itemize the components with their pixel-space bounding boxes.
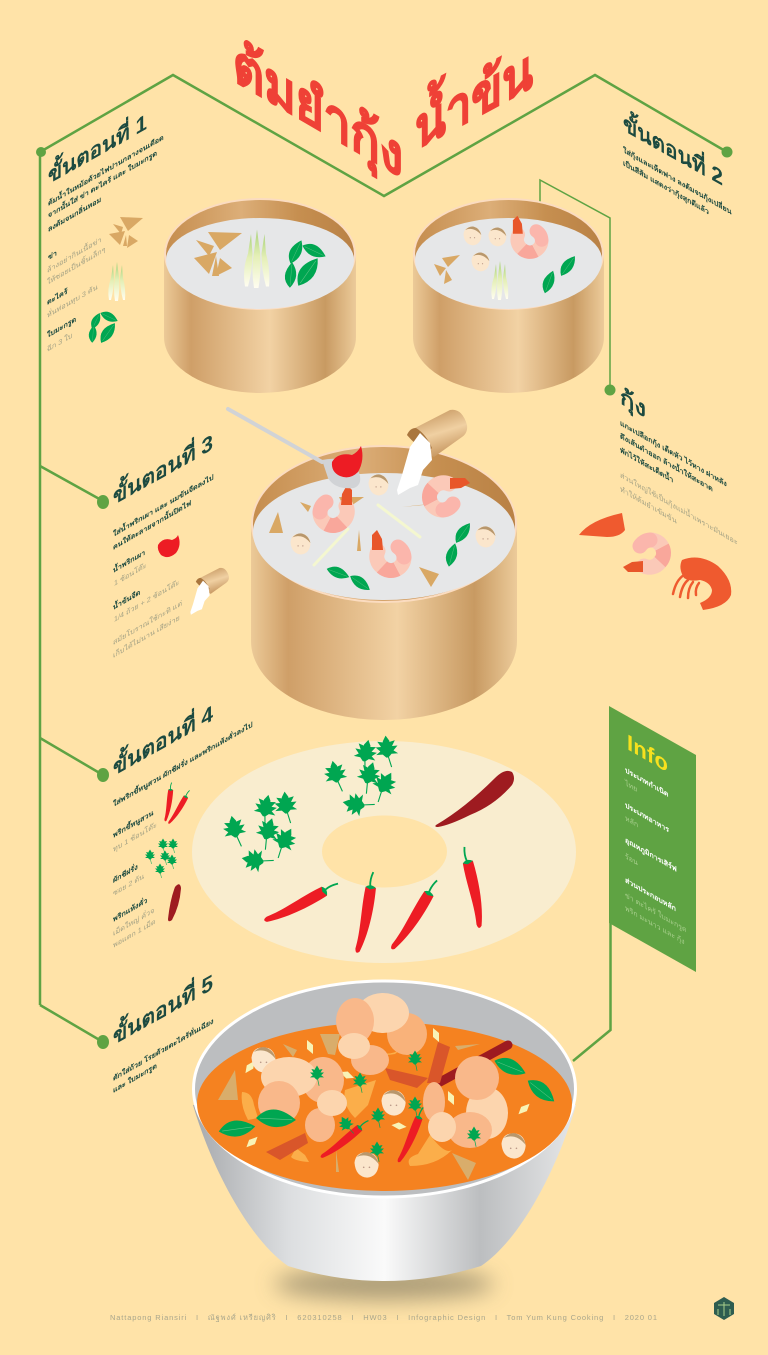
step 4 text: พริกขี้หนูสวน — [113, 806, 154, 841]
step 3 text: ใส่น้ำพริกเผา และ นมข้นจืดลงไป — [113, 471, 214, 539]
milk can pouring — [397, 410, 467, 495]
step 3 text: ขั้นตอนที่ 3 — [113, 425, 213, 511]
step 3 text: สมัยโบราณใช้กะทิ แต่ — [113, 599, 182, 647]
step 3 text: เก็บได้ไม่นาน เสียง่าย — [113, 612, 180, 660]
step 1 text: หั่นท่อนทุบ 3 ต้น — [47, 281, 98, 320]
icon: small dried chili — [168, 884, 181, 921]
icon: lemongrass small — [108, 262, 125, 301]
icon: milk can small — [190, 568, 229, 615]
step 4 text: ซอย 2 ต้น — [113, 871, 145, 898]
pot 2 — [413, 198, 604, 393]
shrimp top — [336, 993, 428, 1088]
step 1 text — [47, 104, 164, 354]
prawn prep text: ดึงเส้นดำออก ล้างน้ำให้สะอาด — [620, 430, 713, 493]
step 4 text: ใส่พริกขี้หนูสวน ผักชีฝรั่ง และพริกแห้งคั่วลงไป — [113, 718, 253, 810]
step 4 text: ทุบ 1 ช้อนโต๊ะ — [113, 820, 157, 854]
icon: small herbs — [145, 838, 178, 878]
info panel: ประเภทกำเนิด — [625, 766, 668, 799]
green connector lines — [36, 75, 732, 1061]
info panel: ไทย — [624, 778, 637, 794]
tom yum bowl — [193, 981, 576, 1281]
footer credits: Nattapong Riansiri I ณัฐพงศ์ เหรียญศิริ I 620310258 I HW03 I Infographic Design I Tom Yum Kung Cooking I 2020 01 — [110, 1313, 657, 1322]
step 3 text: น้ำพริกเผา — [113, 546, 145, 575]
dried chili in soup — [440, 1045, 508, 1082]
shrimp right — [423, 1042, 508, 1148]
step 4 text — [113, 695, 253, 950]
pot 2 ingredients — [434, 216, 579, 300]
info panel: Info — [627, 730, 668, 778]
prawn prep text: แกะเปลือกกุ้ง เด็ดหัว ไว้หาง ผ่าหลัง — [620, 417, 727, 489]
step 1 text: ต้มน้ำในหม้อด้วยไฟปานกลางจนเดือด — [48, 131, 164, 208]
chilies — [263, 846, 490, 954]
step 2 text: ขั้นตอนที่ 2 — [623, 106, 723, 192]
step 1 text: ขั้นตอนที่ 1 — [48, 104, 147, 190]
info panel: หลัก — [625, 814, 638, 829]
step 3 text: คนให้ละลายจากนั้นปิดไฟ — [113, 497, 191, 552]
prawn prep text — [620, 384, 738, 547]
step 1 text: จากนั้นใส่ ข่า ตะไคร้ และ ใบมะกรูด — [48, 147, 157, 221]
title: ต้มยำกุ้ง — [233, 29, 403, 194]
step 5 text: และ ใบมะกรูด — [113, 1060, 157, 1096]
step 1 text: ล้างอย่ากินเนื้อข่า — [47, 233, 101, 275]
step 3 text: 1/4 ถ้วย + 2 ช้อนโต๊ะ — [114, 578, 179, 624]
title — [233, 26, 533, 194]
info panel: พริก มะนาว และ กุ้ง — [625, 904, 685, 946]
icon: chili paste small — [158, 535, 180, 557]
info panel: อุณหภูมิการเสิร์ฟ — [625, 836, 677, 875]
info panel: ส่วนประกอบหลัก — [625, 876, 676, 913]
bowl shadow — [274, 1268, 494, 1300]
dried chili — [435, 771, 514, 827]
step 2 text: ใส่กุ้งและเห็ดฟาง ลงต้มจนกุ้งเปลี่ยน — [623, 144, 732, 218]
prawn prep text: ทำให้ต้มยำเข้มข้น — [620, 485, 677, 526]
info panel: ร้อน — [625, 852, 638, 867]
step 1 text: ลงต้มจนกลิ่นหอม — [48, 193, 101, 234]
step 1 text: ฉีก 3 ใบ — [47, 331, 72, 354]
pot 3 — [251, 445, 517, 720]
icon: kaffir leaves small — [88, 309, 120, 346]
info panel: ประเภทอาหาร — [625, 801, 670, 835]
step 1 text: ใบมะกรูด — [47, 314, 76, 341]
chilies and herbs in soup — [310, 1050, 481, 1165]
prawn illustrations — [579, 513, 731, 610]
icon: galangal small — [109, 217, 143, 248]
step 2 text: เป็นสีส้ม แสดงว่ากุ้งสุกดีแล้ว — [623, 157, 709, 217]
step 4 text: พอแตก 1 เม็ด — [113, 916, 156, 950]
step 1 text: ให้ซอยเป็นชิ้นเล็กๆ — [47, 243, 105, 287]
shrimp left — [258, 1057, 347, 1160]
step 5 text: ตักใส่ถ้วย โรยด้วยตะไคร้หั่นเฉียง — [113, 1015, 214, 1083]
soup vegetables — [218, 1028, 532, 1180]
info panel — [609, 706, 696, 972]
ring plate of herbs and chilies — [192, 735, 576, 963]
step 1 text: ข่า — [48, 248, 57, 262]
prawn prep text: กุ้ง — [620, 384, 646, 424]
step 5 text — [113, 965, 214, 1096]
pot 1 ingredients — [194, 230, 328, 290]
step 3 text — [113, 425, 214, 660]
icon: small chilies — [164, 782, 192, 826]
logo badge — [714, 1297, 734, 1320]
prawn prep text: ส่วนใหญ่ใช้เป็นกุ้งแม่น้ำเพราะมันเยอะ — [620, 469, 738, 547]
prawn prep text: พักไว้ให้สะเด็ดน้ำ — [620, 444, 673, 485]
step 1 text: ตะไคร้ — [47, 285, 68, 307]
spoon with chili paste — [228, 409, 362, 488]
step 3 text: 1 ช้อนโต๊ะ — [114, 561, 147, 588]
step 4 text: พริกแห้งคั่ว — [113, 894, 147, 924]
title: น้ำข้น — [415, 26, 533, 162]
herbs left cluster — [221, 791, 301, 875]
step 4 text: ขั้นตอนที่ 4 — [113, 695, 214, 782]
step 4 text: เม็ดใหญ่ คั่วจ — [113, 905, 154, 938]
step 4 text: ผักชีฝรั่ง — [113, 860, 138, 885]
info panel: ข่า ตะไคร้ ใบมะกรูด — [625, 891, 687, 934]
step 5 text: ขั้นตอนที่ 5 — [113, 965, 213, 1051]
basil leaves in soup — [218, 1053, 559, 1139]
pot 1 — [164, 198, 356, 393]
soup — [197, 1022, 572, 1191]
pot 3 ingredients — [269, 474, 495, 594]
step 3 text: น้ำข้นจืด — [113, 586, 140, 612]
herbs right cluster — [322, 735, 401, 819]
